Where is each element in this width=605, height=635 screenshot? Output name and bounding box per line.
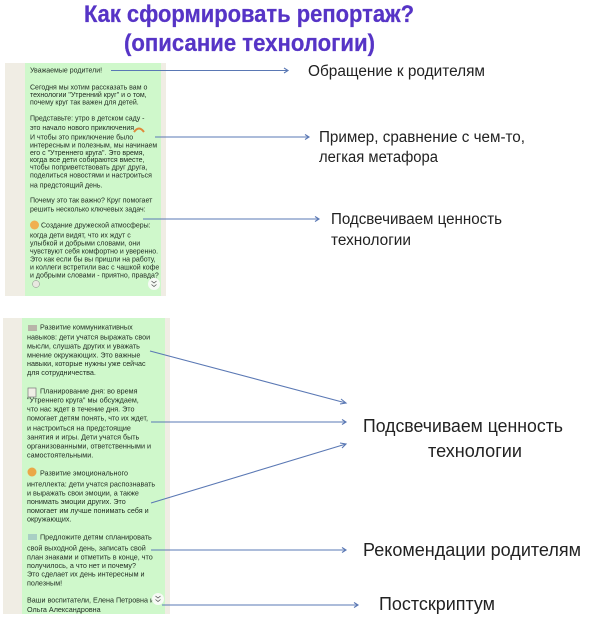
message text: greeting and introduction: почему круг так важен для детей. — [30, 98, 139, 106]
panel: first chat screenshot — [5, 63, 166, 296]
message text: greeting and introduction: Создание дружеской атмосферы: — [41, 222, 151, 230]
message text: greeting and introduction: его с "Утреннего круга". Это время, — [30, 150, 145, 157]
icon: notepad — [28, 388, 36, 397]
arrow: example — [155, 134, 309, 140]
icon: map — [28, 534, 37, 540]
message text: recommendations and signature: помогает детям понять, что их ждет, — [27, 414, 148, 422]
message text: recommendations and signature: занятия и игры. Дети учатся быть — [27, 432, 140, 442]
message text: greeting and introduction: интересным и полезным, мы начинаем — [30, 142, 157, 150]
message text: recommendations and signature: мысли, слушать других и уважать — [27, 342, 140, 350]
message text: recommendations and signature: навыки, которые нужны уже сейчас — [27, 359, 146, 368]
label: value of technology two — [363, 416, 563, 461]
message text: recommendations and signature: план знаками и отметить в конце, что — [27, 552, 153, 562]
icon: scroll down button — [152, 593, 164, 605]
label: value of technology one — [331, 211, 502, 249]
arrow: recommendations — [151, 548, 346, 552]
message text: greeting and introduction: решить несколько ключевых задач: — [30, 206, 146, 214]
icon: rainbow — [134, 128, 144, 132]
arrow: value one — [143, 216, 319, 222]
message text: greeting and introduction: Почему это так важно? Круг помогает — [30, 198, 153, 204]
message text: greeting and introduction: улыбкой и добрыми словами, они — [30, 240, 140, 248]
message text: recommendations and signature: Ольга Александровна — [27, 605, 101, 614]
title: (описание технологии) — [124, 30, 375, 57]
message text: greeting and introduction: и коллеги встретили вас с чашкой кофе — [30, 264, 159, 272]
arrow: postscript — [162, 602, 358, 608]
message text: recommendations and signature — [27, 322, 155, 614]
message text: recommendations and signature: Это сделает их день интересным и — [27, 570, 145, 578]
label: value of technology one: технологии — [331, 232, 411, 249]
label: value of technology two: Подсвечиваем ценность — [363, 416, 563, 436]
message text: recommendations and signature: интеллекта: дети учатся распознавать — [27, 480, 155, 488]
message text: greeting and introduction: И чтобы это приключение было — [30, 134, 133, 142]
message text: greeting and introduction: технологии "Утренний круг" и о том, — [30, 91, 147, 99]
label: greeting: Обращение к родителям — [308, 63, 485, 80]
message text: recommendations and signature: помогает им лучше понимать себя и — [27, 506, 149, 515]
message text: recommendations and signature: навыков: дети учатся выражать свои — [27, 332, 150, 342]
message text: recommendations and signature: полезным! — [27, 578, 62, 588]
message text: greeting and introduction: Это как если бы вы пришли на работу, — [30, 256, 156, 264]
message text: greeting and introduction: на предстоящий день. — [30, 182, 103, 190]
panel: second chat screenshot — [3, 318, 170, 614]
message text: greeting and introduction: и добрыми словами - приятно, правда? — [30, 272, 159, 280]
icon: emotional face — [28, 468, 36, 476]
message text: greeting and introduction: это начало нового приключения — [30, 125, 134, 132]
arrow: emotions to value — [151, 443, 346, 503]
title: Как сформировать репортаж? — [84, 1, 414, 28]
message text: greeting and introduction: Уважаемые родители! — [30, 68, 102, 74]
arrow: planning to value — [151, 420, 346, 424]
label: postscript: Постскриптум — [379, 594, 495, 614]
message text: recommendations and signature: для сотрудничества. — [27, 368, 96, 377]
message text: greeting and introduction: когда все дети собираются вместе, — [30, 156, 144, 164]
message text: greeting and introduction — [30, 68, 159, 280]
message text: recommendations and signature: Развитие эмоционального — [40, 468, 128, 478]
message text: recommendations and signature: Предложите детям спланировать — [40, 532, 152, 542]
message text: recommendations and signature: получилось, а что нет и почему? — [27, 561, 136, 570]
message text: greeting and introduction: когда дети видят, что их ждут с — [30, 232, 131, 240]
message text: recommendations and signature: что нас ждет в течение дня. Это — [27, 404, 134, 414]
message text: recommendations and signature: "Утреннего круга" мы обсуждаем, — [27, 396, 139, 404]
icon: hands — [28, 325, 37, 331]
message text: greeting and introduction: чувствуют себя комфортно и уверенно. — [30, 248, 158, 256]
arrow: greeting — [111, 68, 288, 73]
message text: recommendations and signature: организованными, ответственными и — [27, 442, 151, 450]
icon: smiling face — [30, 220, 39, 230]
message text: recommendations and signature: Ваши воспитатели, Елена Петровна и — [27, 596, 154, 604]
label: example and metaphor — [319, 129, 525, 166]
message text: greeting and introduction: чтобы поприветствовать друг друга, — [30, 164, 147, 172]
message text: recommendations and signature: самостоятельными. — [27, 450, 93, 460]
title — [84, 1, 414, 57]
label: recommendations: Рекомендации родителям — [363, 540, 581, 560]
label: value of technology one: Подсвечиваем ценность — [331, 211, 502, 228]
label: example and metaphor: легкая метафора — [319, 149, 438, 166]
label: value of technology two: технологии — [428, 441, 522, 461]
message text: greeting and introduction: поделиться новостями и настроиться — [30, 172, 152, 180]
message text: recommendations and signature: Планирование дня: во время — [40, 386, 138, 396]
icon: small smile — [32, 280, 40, 288]
message text: greeting and introduction: Представьте: утро в детском саду - — [30, 116, 145, 122]
arrow: communication to value — [150, 351, 346, 404]
message text: recommendations and signature: и выражать свои эмоции, а также — [27, 488, 139, 498]
message text: recommendations and signature: Развитие коммуникативных — [40, 322, 133, 332]
message text: recommendations and signature: свой выходной день, записать свой — [27, 544, 146, 552]
message text: greeting and introduction: Сегодня мы хотим рассказать вам о — [30, 84, 147, 92]
label: example and metaphor: Пример, сравнение с чем-то, — [319, 129, 525, 146]
message text: recommendations and signature: окружающих. — [27, 514, 71, 524]
message text: recommendations and signature: и настроиться на предстоящие — [27, 424, 131, 432]
icon: scroll down button — [148, 278, 160, 290]
message text: recommendations and signature: мнение окружающих. Это важные — [27, 350, 140, 360]
message text: recommendations and signature: понимать эмоции других. Это — [27, 497, 126, 506]
